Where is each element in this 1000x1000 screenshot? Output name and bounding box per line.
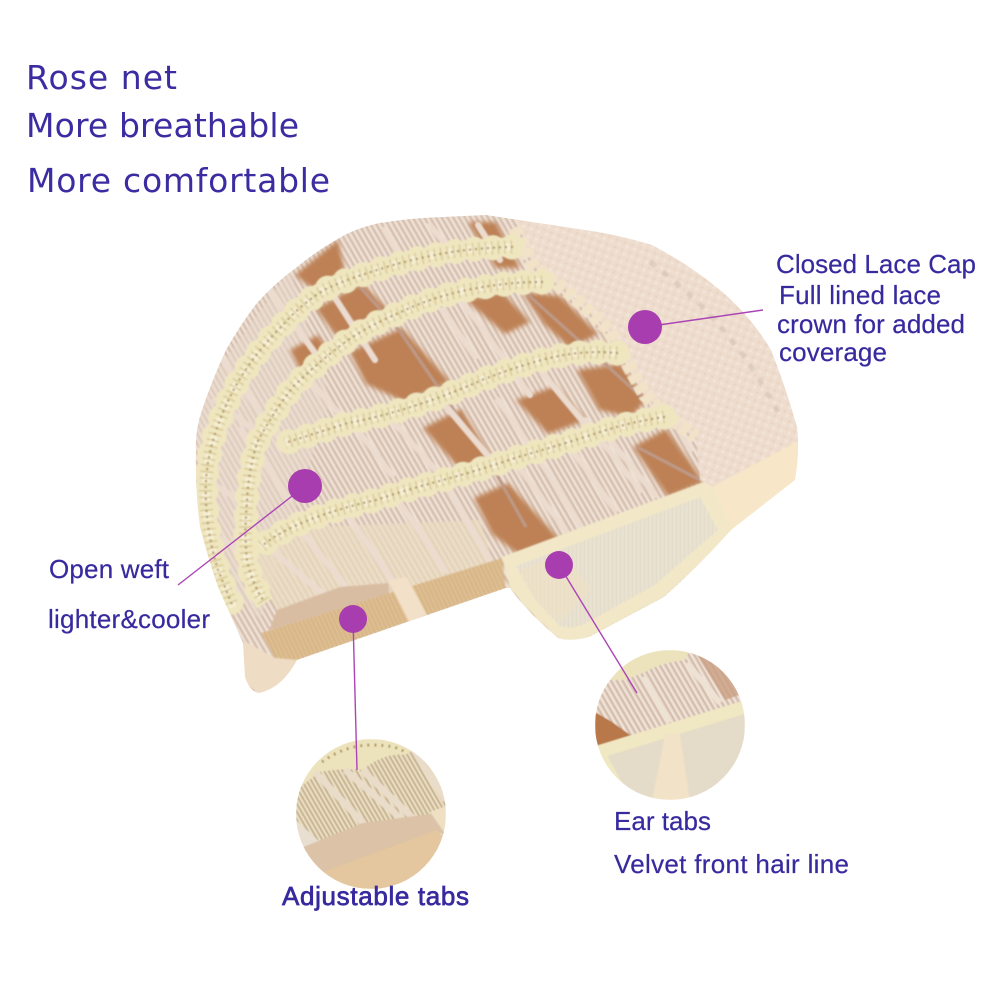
heading: more comfortable: More comfortable [27, 161, 330, 200]
label: open weft: Open weft [49, 554, 170, 584]
adjustable tan band [269, 583, 390, 630]
callout: adjustable tabs [339, 605, 367, 770]
wig cap illustration [190, 210, 810, 710]
label: closed lace cap: crown for added [777, 309, 965, 339]
label: closed lace cap: Closed Lace Cap [776, 249, 976, 279]
callout: open weft [178, 469, 322, 585]
inset: ear tabs close-up [595, 650, 745, 800]
callout: closed lace cap [628, 310, 763, 344]
closed lace crown [514, 214, 805, 487]
heading: rose net: Rose net [26, 58, 177, 97]
cap body [190, 210, 810, 710]
inset: adjustable tabs close-up [296, 739, 450, 889]
label: open weft: lighter&cooler [48, 604, 210, 634]
label: ear tabs: Velvet front hair line [614, 849, 849, 879]
heading: more breathable: More breathable [26, 106, 299, 145]
callout: ear tabs [545, 551, 637, 693]
label: ear tabs: Ear tabs [614, 806, 711, 836]
lace bands [206, 247, 512, 607]
ear tab [502, 482, 735, 641]
label: open weft [48, 554, 210, 634]
label: adjustable tabs: Adjustable tabs [282, 881, 469, 911]
label: closed lace cap: coverage [779, 337, 887, 367]
label: closed lace cap: Full lined lace [779, 280, 941, 310]
label: ear tabs [614, 806, 849, 879]
label: closed lace cap [776, 249, 976, 367]
rear cream section [712, 441, 798, 528]
